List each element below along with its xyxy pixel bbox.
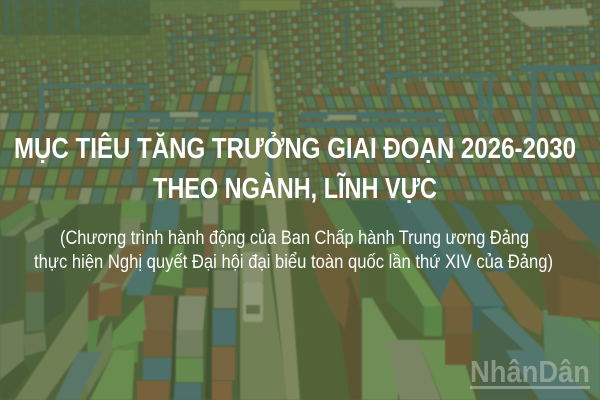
brown long container [412, 248, 472, 307]
title [14, 132, 576, 205]
far right container wall [535, 230, 600, 320]
blue long container [405, 200, 505, 306]
brown container right [485, 272, 545, 335]
diagonal yard lane [15, 240, 145, 400]
brown container [100, 245, 150, 285]
central access road [240, 50, 300, 400]
green bottom-right container [543, 308, 600, 400]
green container [386, 245, 442, 307]
subtitle [34, 227, 553, 273]
road with truck [240, 200, 325, 400]
lower left container stacks [0, 200, 300, 400]
title: THEO NGÀNH, LĨNH VỰC [153, 173, 437, 205]
centre column stacks [143, 295, 177, 330]
gantry cranes [0, 0, 600, 184]
lower right containers [300, 200, 600, 400]
foreground long blue and green containers [55, 352, 102, 400]
blue and green container tops [127, 240, 158, 295]
upper centre containers [120, 200, 146, 226]
blue bottom container [480, 307, 565, 370]
